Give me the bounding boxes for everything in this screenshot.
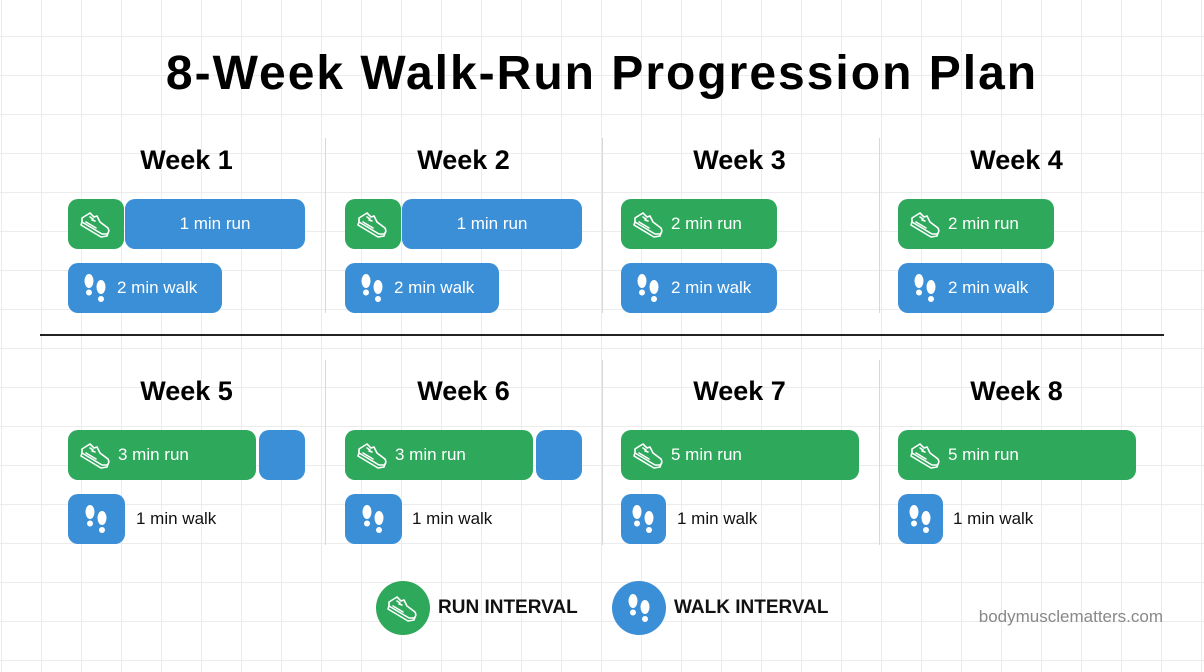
walk block (68, 263, 222, 313)
walk block (345, 263, 499, 313)
panel: week 8 (898, 376, 1136, 544)
run block: 3 min run (395, 445, 466, 464)
heading: week 2: Week 2 (417, 145, 510, 175)
panel: week 1 (68, 145, 305, 313)
legend: run interval: RUN INTERVAL (438, 597, 578, 618)
heading: week 8: Week 8 (970, 376, 1063, 406)
walk block (621, 494, 758, 544)
walk block (898, 494, 1034, 544)
walk block: 1 min walk (136, 509, 216, 528)
panel: week 3 (621, 145, 786, 313)
run block (345, 430, 582, 480)
watermark: bodymusclematters.com (979, 607, 1163, 626)
walk block: 2 min walk (394, 278, 474, 297)
legend: walk interval (612, 581, 828, 635)
run block: 1 min run (457, 214, 527, 233)
run block (345, 199, 582, 249)
walk block: 1 min walk (953, 509, 1033, 528)
heading: week 1: Week 1 (140, 145, 233, 175)
walk block: 2 min walk (117, 278, 197, 297)
walk block (621, 263, 777, 313)
walk block (345, 494, 492, 544)
panel: week 6 (345, 376, 582, 544)
legend: walk interval: WALK INTERVAL (674, 597, 828, 618)
run block (621, 430, 859, 480)
heading: week 3: Week 3 (693, 145, 786, 175)
walk block: 1 min walk (677, 509, 757, 528)
walk block: 2 min walk (671, 278, 751, 297)
run block (898, 430, 1136, 480)
run block (68, 430, 305, 480)
walk block: 1 min walk (412, 509, 492, 528)
run block (68, 199, 305, 249)
run block (898, 199, 1054, 249)
title: 8-Week Walk-Run Progression Plan (166, 47, 1038, 100)
heading: week 7: Week 7 (693, 376, 786, 406)
panel: week 4 (898, 145, 1063, 313)
run block: 2 min run (948, 214, 1019, 233)
walk block (898, 263, 1054, 313)
run block: 1 min run (180, 214, 250, 233)
legend (376, 581, 828, 635)
panel: week 5 (68, 376, 305, 544)
run block: 5 min run (948, 445, 1019, 464)
legend: run interval (376, 581, 578, 635)
heading: week 4: Week 4 (970, 145, 1063, 175)
heading: week 5: Week 5 (140, 376, 233, 406)
run block (621, 199, 777, 249)
walk block (68, 494, 216, 544)
run block: 3 min run (118, 445, 189, 464)
run block: 5 min run (671, 445, 742, 464)
panel: week 2 (345, 145, 582, 313)
panel: week 7 (621, 376, 859, 544)
heading: week 6: Week 6 (417, 376, 510, 406)
run block: 2 min run (671, 214, 742, 233)
walk block: 2 min walk (948, 278, 1028, 297)
